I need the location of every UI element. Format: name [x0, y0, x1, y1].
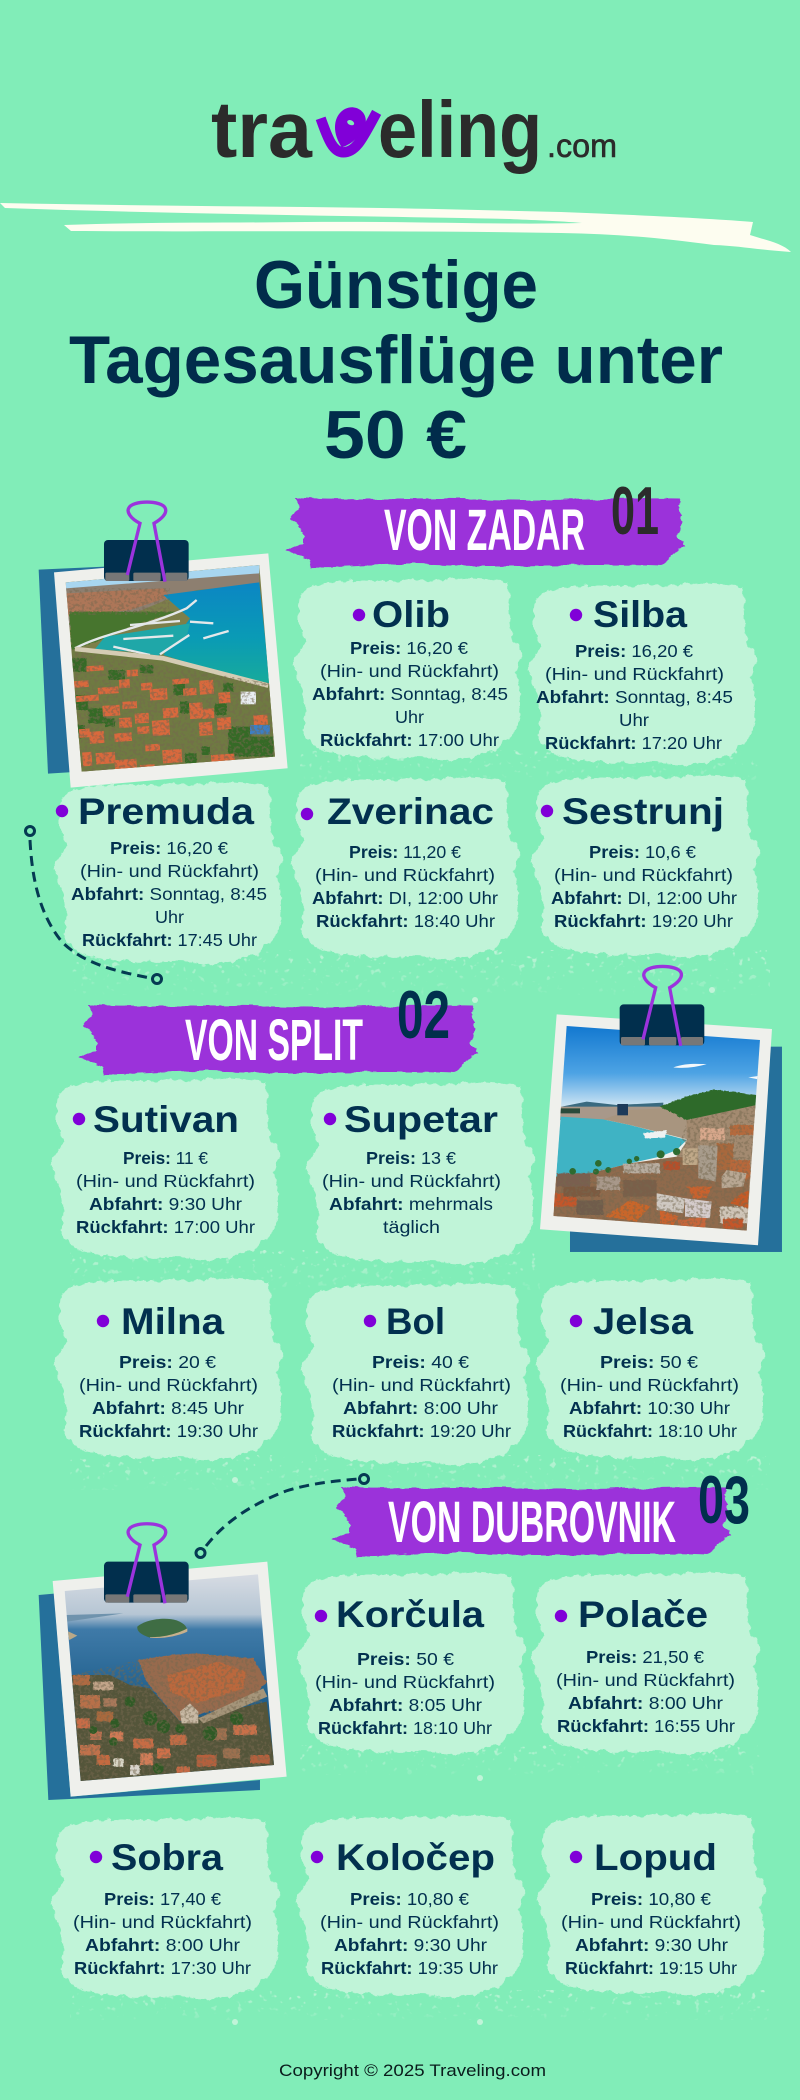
details: Preis: 10,80 €	[350, 1889, 469, 1909]
details	[561, 1889, 741, 1978]
details: (Hin- und Rückfahrt)	[79, 1375, 258, 1395]
details: Abfahrt: 8:00 Uhr	[85, 1935, 240, 1955]
details: Abfahrt: Sonntag, 8:45	[536, 687, 733, 707]
photo: Dubrovnik	[39, 1524, 287, 1800]
card: Supetar	[306, 1082, 535, 1264]
details: Abfahrt: 8:05 Uhr	[329, 1695, 482, 1715]
dashed arrow: Zadar to Split	[26, 826, 162, 984]
card: Sutivan	[51, 1078, 280, 1260]
details: (Hin- und Rückfahrt)	[560, 1375, 739, 1395]
details: Abfahrt: DI, 12:00 Uhr	[551, 888, 737, 908]
card: Milna: Milna	[121, 1301, 224, 1342]
details: Preis: 50 €	[357, 1649, 454, 1669]
binder clip	[104, 1524, 189, 1603]
details	[560, 1352, 739, 1441]
details	[315, 1649, 495, 1738]
details: Preis: 20 €	[119, 1352, 216, 1372]
section 1 banner: Von Zadar: VON ZADAR	[384, 498, 585, 563]
details: Rückfahrt: 19:15 Uhr	[565, 1958, 737, 1978]
card: Silba	[528, 583, 757, 765]
details: Abfahrt: 9:30 Uhr	[89, 1194, 242, 1214]
card: Lopud	[537, 1813, 766, 1995]
details: Abfahrt: 9:30 Uhr	[334, 1935, 487, 1955]
card: Korčula	[297, 1572, 526, 1754]
details	[312, 842, 498, 931]
details: Abfahrt: 9:30 Uhr	[575, 1935, 728, 1955]
details: Abfahrt: Sonntag, 8:45	[71, 884, 267, 904]
card: Olib	[293, 578, 522, 760]
details: (Hin- und Rückfahrt)	[556, 1670, 735, 1690]
title: 50 €	[324, 397, 467, 473]
card: Premuda: Premuda	[78, 791, 254, 832]
details: Rückfahrt: 18:10 Uhr	[318, 1718, 492, 1738]
details: Rückfahrt: 17:20 Uhr	[545, 733, 722, 753]
details: Preis: 21,50 €	[586, 1647, 704, 1667]
title: Tagesausflüge unter	[69, 322, 723, 398]
card: Lopud: Lopud	[594, 1837, 717, 1878]
card: Korčula: Korčula	[336, 1594, 484, 1635]
details	[556, 1647, 735, 1736]
details: (Hin- und Rückfahrt)	[320, 661, 499, 681]
section 2 banner: Von Split	[78, 977, 478, 1074]
photo: Zadar	[39, 502, 288, 788]
details: Rückfahrt: 17:45 Uhr	[82, 930, 257, 950]
section 1 banner: Von Zadar	[285, 473, 685, 567]
details: Abfahrt: DI, 12:00 Uhr	[312, 888, 498, 908]
details: Rückfahrt: 19:35 Uhr	[321, 1958, 498, 1978]
section 2 banner: Von Split: VON SPLIT	[185, 1008, 363, 1073]
details: (Hin- und Rückfahrt)	[315, 1672, 495, 1692]
card: Zverinac: Zverinac	[327, 791, 494, 832]
details	[332, 1352, 511, 1441]
details: Preis: 10,6 €	[589, 842, 696, 862]
details: Preis: 11,20 €	[349, 842, 461, 862]
details	[73, 1889, 252, 1978]
details: (Hin- und Rückfahrt)	[322, 1171, 501, 1191]
details: Preis: 10,80 €	[591, 1889, 711, 1909]
details: Abfahrt: 10:30 Uhr	[569, 1398, 730, 1418]
card: Koločep	[296, 1815, 525, 1997]
details: (Hin- und Rückfahrt)	[561, 1912, 741, 1932]
details: (Hin- und Rückfahrt)	[332, 1375, 511, 1395]
details: (Hin- und Rückfahrt)	[320, 1912, 499, 1932]
card: Premuda	[54, 782, 283, 964]
number 03: 03	[698, 1462, 750, 1538]
card: Jelsa: Jelsa	[593, 1301, 693, 1342]
details: Rückfahrt: 16:55 Uhr	[557, 1716, 735, 1736]
details: Rückfahrt: 17:00 Uhr	[320, 730, 499, 750]
details: Abfahrt: mehrmals	[329, 1194, 493, 1214]
details: Rückfahrt: 17:30 Uhr	[74, 1958, 251, 1978]
logo: traveling.com: .com	[547, 127, 617, 164]
details: Uhr	[155, 907, 184, 927]
title	[69, 247, 723, 473]
card: Bol: Bol	[386, 1301, 445, 1342]
logo: traveling.com: eling	[378, 85, 542, 174]
card: Sutivan: Sutivan	[93, 1099, 239, 1140]
logo: traveling.com: tra	[211, 85, 313, 174]
card: Sestrunj: Sestrunj	[562, 791, 724, 832]
details: täglich	[383, 1217, 440, 1237]
card: Zverinac	[291, 777, 520, 959]
details	[79, 1352, 258, 1441]
details: Uhr	[395, 707, 424, 727]
details: (Hin- und Rückfahrt)	[76, 1171, 255, 1191]
card: Jelsa	[536, 1278, 765, 1460]
details: Abfahrt: Sonntag, 8:45	[312, 684, 508, 704]
details	[322, 1148, 501, 1237]
details: Rückfahrt: 19:20 Uhr	[332, 1421, 511, 1441]
title: Günstige	[254, 247, 538, 323]
card: Milna	[54, 1278, 283, 1460]
photo: Split	[540, 966, 782, 1252]
details: Preis: 16,20 €	[350, 638, 468, 658]
details: Preis: 11 €	[123, 1148, 208, 1168]
binder clip	[620, 966, 704, 1046]
binder clip	[104, 502, 189, 582]
card: Koločep: Koločep	[336, 1837, 495, 1878]
card: Sestrunj	[531, 775, 760, 957]
number 02: 02	[397, 977, 450, 1053]
details: Rückfahrt: 19:30 Uhr	[79, 1421, 258, 1441]
card: Polače: Polače	[578, 1594, 708, 1635]
white brush stroke	[0, 203, 791, 252]
details: Preis: 17,40 €	[104, 1889, 221, 1909]
details: Preis: 16,20 €	[575, 641, 693, 661]
card: Sobra	[51, 1817, 280, 1999]
details: (Hin- und Rückfahrt)	[80, 861, 259, 881]
details: Preis: 16,20 €	[110, 838, 228, 858]
dashed arrow: Split to Dubrovnik	[196, 1474, 368, 1558]
card: Polače	[531, 1572, 760, 1754]
details: Preis: 40 €	[372, 1352, 469, 1372]
details: Abfahrt: 8:45 Uhr	[92, 1398, 244, 1418]
details: (Hin- und Rückfahrt)	[554, 865, 733, 885]
details: Abfahrt: 8:00 Uhr	[568, 1693, 723, 1713]
card: Bol	[301, 1283, 530, 1465]
details: Rückfahrt: 18:40 Uhr	[316, 911, 495, 931]
details	[320, 1889, 499, 1978]
number 01: 01	[611, 473, 659, 549]
copyright: Copyright © 2025 Traveling.com	[279, 2061, 546, 2080]
card: Silba: Silba	[593, 594, 687, 635]
details: Uhr	[619, 710, 649, 730]
icon: stylised purple v	[321, 107, 377, 152]
card: Olib: Olib	[372, 594, 450, 635]
details	[71, 838, 267, 950]
details: Abfahrt: 8:00 Uhr	[343, 1398, 498, 1418]
details: (Hin- und Rückfahrt)	[545, 664, 724, 684]
logo: traveling.com	[211, 85, 617, 174]
details	[312, 638, 508, 750]
details: Rückfahrt: 19:20 Uhr	[554, 911, 733, 931]
details: Preis: 13 €	[366, 1148, 456, 1168]
card: Sobra: Sobra	[111, 1837, 223, 1878]
details: Rückfahrt: 18:10 Uhr	[563, 1421, 737, 1441]
spray texture under cards	[70, 750, 770, 2025]
details: (Hin- und Rückfahrt)	[315, 865, 495, 885]
details: Rückfahrt: 17:00 Uhr	[76, 1217, 255, 1237]
details	[551, 842, 737, 931]
section 3 banner: Von Dubrovnik	[331, 1462, 750, 1556]
details: (Hin- und Rückfahrt)	[73, 1912, 252, 1932]
details: Preis: 50 €	[600, 1352, 698, 1372]
card: Supetar: Supetar	[344, 1099, 498, 1140]
details	[536, 641, 733, 753]
details	[76, 1148, 255, 1237]
